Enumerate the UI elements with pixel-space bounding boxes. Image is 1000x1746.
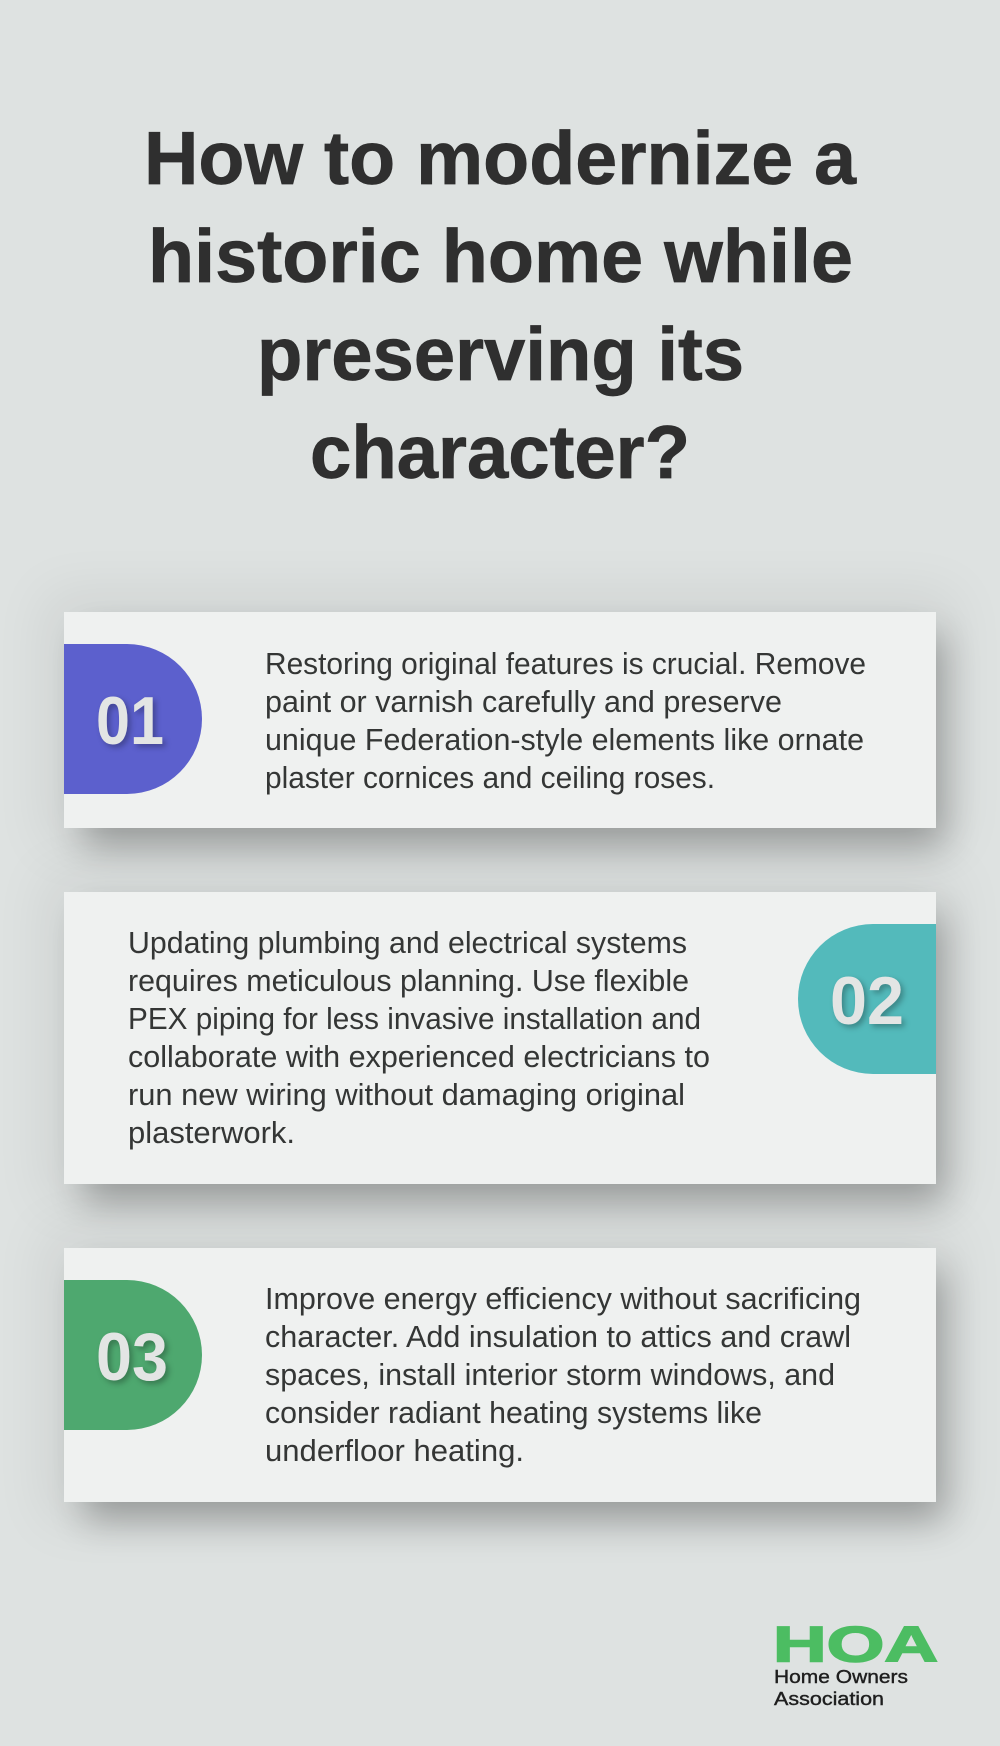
title: preserving its (257, 312, 744, 396)
text: step 2: requires meticulous planning. Use flexible (128, 964, 689, 998)
text: step 2 (128, 926, 710, 1150)
text: step 2: run new wiring without damaging original (128, 1078, 685, 1112)
text: step 1: Restoring original features is crucial. Remove (265, 647, 866, 681)
badge: 02 (798, 924, 936, 1074)
badge: 02: 02 (830, 963, 904, 1039)
text: step 1: unique Federation-style elements like ornate (265, 723, 864, 757)
text: step 3: underfloor heating. (265, 1434, 524, 1468)
badge: 01 (64, 644, 202, 794)
badge: 01: 01 (96, 683, 164, 759)
title: How to modernize a (144, 116, 857, 200)
panel: step 2 (44, 872, 956, 1204)
logo: HOA Home Owners Association (773, 1616, 938, 1709)
text: step 2: plasterwork. (128, 1116, 295, 1150)
text: step 1: paint or varnish carefully and preserve (265, 685, 782, 719)
text: step 3: Improve energy efficiency without sacrificing (265, 1282, 861, 1316)
logo: HOA Home Owners Association: HOA (773, 1616, 938, 1672)
text: step 1: plaster cornices and ceiling roses. (265, 761, 715, 795)
text: step 3: consider radiant heating systems like (265, 1396, 762, 1430)
badge: 03: 03 (96, 1319, 168, 1395)
title: character? (310, 410, 690, 494)
text: step 3: character. Add insulation to attics and crawl (265, 1320, 851, 1354)
panel: step 1 (44, 592, 956, 848)
text: step 1 (265, 647, 866, 795)
badge: 03 (64, 1280, 202, 1430)
text: step 2: collaborate with experienced electricians to (128, 1040, 710, 1074)
text: step 3: spaces, install interior storm windows, and (265, 1358, 835, 1392)
text: step 2: PEX piping for less invasive installation and (128, 1002, 701, 1036)
logo: HOA Home Owners Association: Association (774, 1688, 884, 1709)
title: historic home while (148, 214, 853, 298)
title (144, 116, 857, 494)
text: step 3 (265, 1282, 861, 1468)
panel: step 3 (44, 1228, 956, 1522)
logo: HOA Home Owners Association: Home Owners (774, 1666, 908, 1687)
text: step 2: Updating plumbing and electrical systems (128, 926, 687, 960)
